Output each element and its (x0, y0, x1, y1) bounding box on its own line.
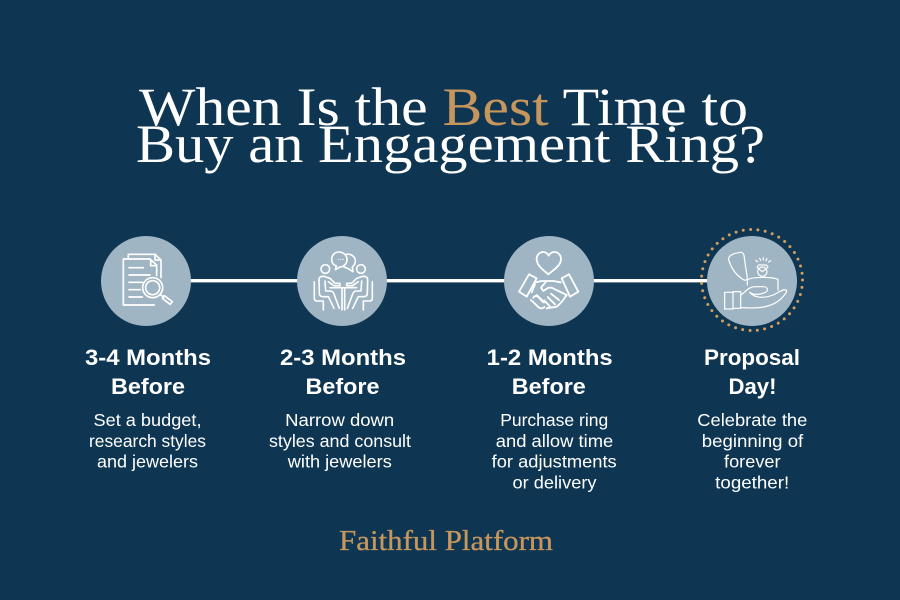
step 1: 3-4 months before: Before (111, 374, 185, 399)
icon: two people meeting at a table (297, 236, 387, 326)
description: together! (715, 472, 789, 492)
description: or delivery (512, 472, 597, 492)
title (136, 77, 765, 174)
description: forever (724, 452, 781, 472)
description: beginning of (702, 431, 803, 451)
heading: 1-2 Months (487, 345, 613, 370)
heading: Proposal (704, 345, 800, 370)
description: for adjustments (492, 452, 617, 472)
step 3: 1-2 months before (487, 236, 617, 492)
icon: hand holding ring box (707, 236, 797, 326)
description: research styles (89, 431, 206, 451)
description (492, 410, 617, 492)
step 3: 1-2 months before: Before (512, 374, 586, 399)
icon: handshake with heart (504, 236, 594, 326)
step 2: 2-3 months before: Before (306, 374, 380, 399)
step 1: 3-4 months before (85, 236, 211, 472)
step 4: proposal day: Day! (728, 374, 776, 399)
heading: 3-4 Months (85, 345, 211, 370)
description: with jewelers (287, 452, 392, 472)
description: Narrow down (285, 410, 394, 430)
timeline connector line (146, 279, 752, 282)
description: Purchase ring (500, 410, 608, 430)
description (269, 410, 411, 472)
step 4: proposal day (697, 230, 807, 492)
description: and jewelers (97, 452, 198, 472)
description: and allow time (496, 431, 613, 451)
brand footer: Faithful Platform (339, 525, 553, 557)
step 2: 2-3 months before (269, 236, 411, 472)
dotted gold ring (702, 230, 802, 330)
description (89, 410, 206, 472)
icon: document with magnifying glass (101, 236, 191, 326)
title: When Is the Best Time to (139, 77, 748, 137)
heading: 2-3 Months (280, 345, 406, 370)
title: Buy an Engagement Ring? (136, 114, 765, 174)
description: Celebrate the (697, 410, 807, 430)
description (697, 410, 807, 492)
description: styles and consult (269, 431, 411, 451)
description: Set a budget, (94, 410, 202, 430)
